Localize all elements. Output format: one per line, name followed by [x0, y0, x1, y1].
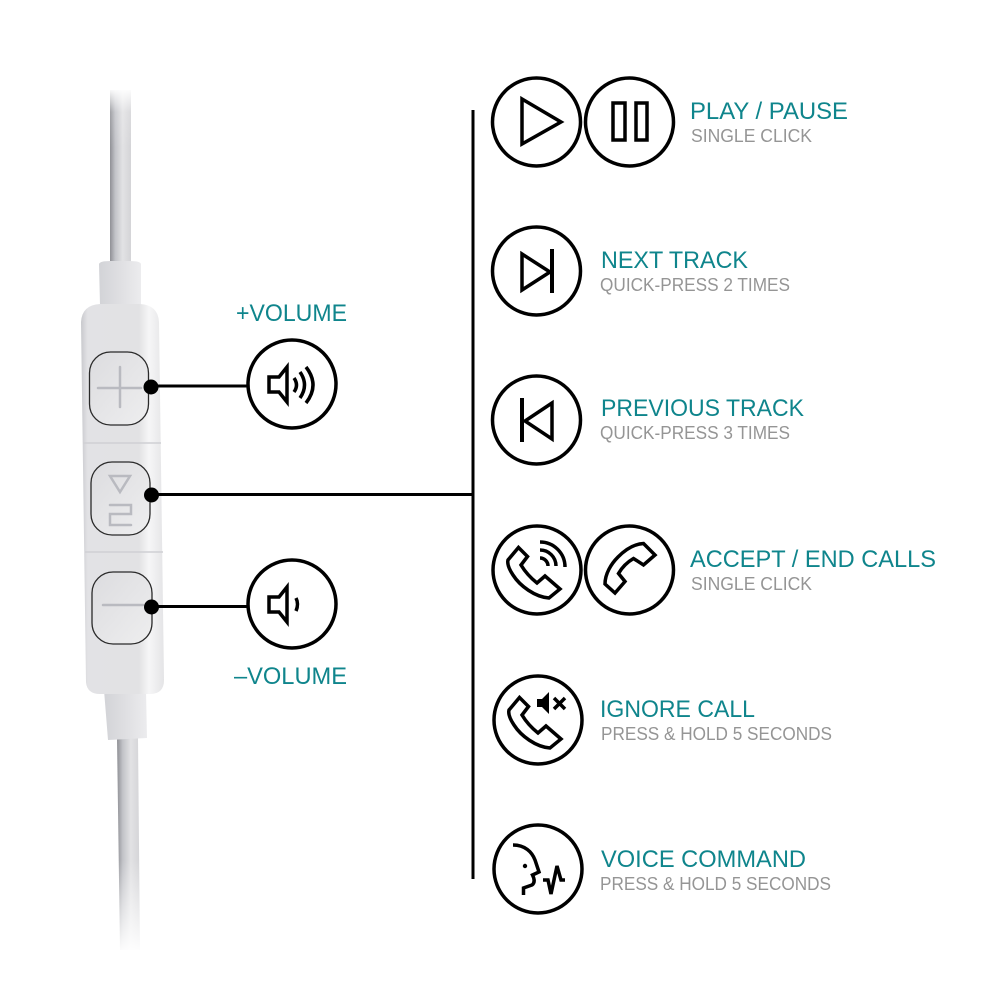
row: play pause [492, 78, 848, 166]
seam lines [83, 443, 163, 552]
instruction: QUICK-PRESS 3 TIMES [600, 422, 790, 443]
instruction: PRESS & HOLD 5 SECONDS [601, 723, 832, 744]
upper collar [99, 261, 141, 305]
volume up label: +VOLUME [236, 300, 347, 327]
heading: NEXT TRACK [601, 247, 748, 274]
heading: ACCEPT / END CALLS [690, 546, 936, 573]
icon: mute call [494, 676, 582, 764]
icon: volume down [248, 560, 336, 648]
icon: incoming call [493, 526, 581, 614]
earphone remote photo [81, 88, 164, 955]
icon: voice [494, 825, 582, 913]
row: accept end calls [493, 526, 936, 614]
icon: volume up [248, 340, 336, 428]
lower cable [112, 738, 146, 955]
connector: center button to vertical bar [144, 488, 473, 502]
plus button [90, 352, 148, 425]
row: next track [492, 227, 790, 315]
remote body [81, 304, 164, 694]
heading: IGNORE CALL [600, 696, 755, 723]
heading: PREVIOUS TRACK [601, 395, 804, 422]
connector: plus button to volume up [144, 380, 248, 394]
vertical bar [472, 110, 474, 879]
icon: pause [586, 78, 674, 166]
minus button [92, 572, 152, 644]
instruction: PRESS & HOLD 5 SECONDS [600, 873, 831, 894]
connector: minus button to volume down [144, 600, 248, 614]
icon: end call [586, 526, 674, 614]
volume down label: –VOLUME [234, 663, 347, 690]
instruction: SINGLE CLICK [691, 125, 813, 146]
row: voice command [494, 825, 831, 913]
heading: VOICE COMMAND [601, 846, 806, 873]
icon: play [492, 78, 580, 166]
heading: PLAY / PAUSE [690, 98, 848, 125]
row: ignore call [494, 676, 832, 764]
row: previous track [492, 376, 804, 464]
upper cable [108, 88, 134, 265]
instruction: SINGLE CLICK [691, 573, 813, 594]
icon: previous [492, 376, 580, 464]
icon: next [492, 227, 580, 315]
instruction: QUICK-PRESS 2 TIMES [600, 274, 790, 295]
multifunction button [91, 462, 150, 535]
lower collar [104, 690, 147, 740]
